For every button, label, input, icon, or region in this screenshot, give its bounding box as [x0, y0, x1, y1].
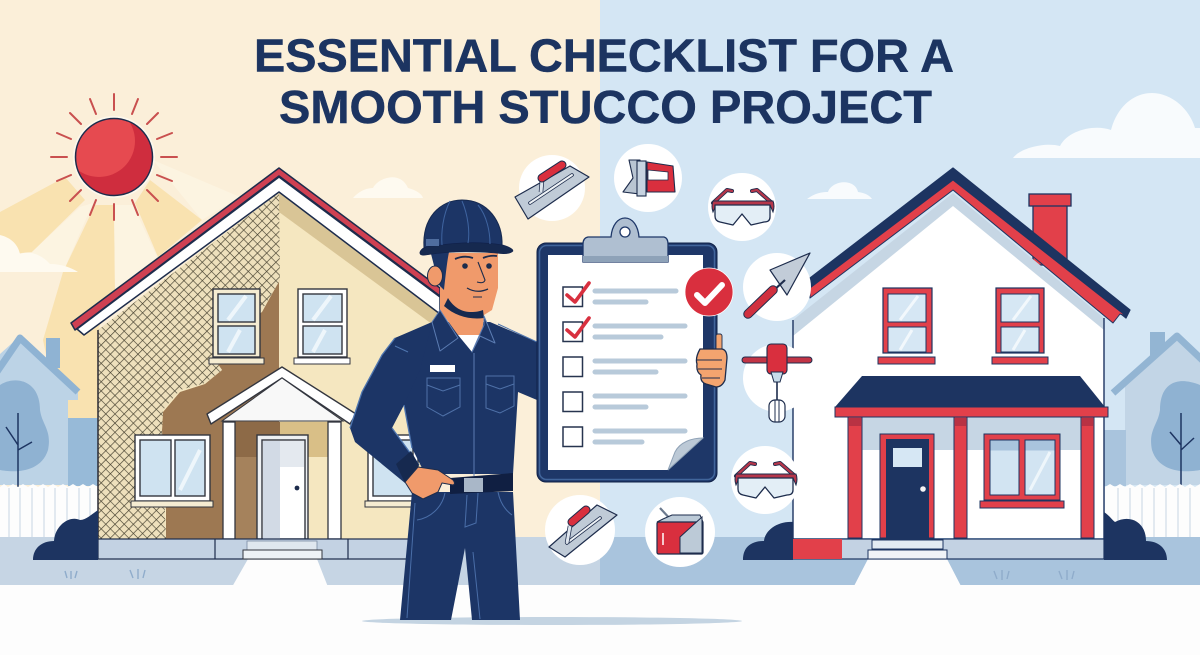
- background: cool sky right: [600, 0, 1200, 540]
- checkboxes: [563, 287, 582, 446]
- right house: upper windows: [878, 288, 1048, 364]
- pockets: [427, 376, 514, 416]
- hand on hip: [405, 467, 454, 499]
- left house: upper windows: [209, 289, 350, 364]
- ear and hair: [427, 250, 449, 290]
- belt: [450, 473, 513, 494]
- right house: door: [880, 434, 934, 538]
- ground bands: [0, 537, 1200, 655]
- worker: [350, 200, 537, 620]
- fence right: [1105, 484, 1200, 537]
- shirt and collar: [458, 335, 481, 352]
- left house: wall: [98, 192, 440, 540]
- icon circle: plastering trowel: [515, 155, 589, 221]
- icon circle: mortar bucket: [645, 497, 715, 567]
- background: warm sky left: [0, 0, 600, 540]
- left house: porch and door: [207, 367, 356, 539]
- bent arm: [350, 323, 432, 483]
- icon circle: margin trowel: [743, 253, 811, 321]
- clip: [583, 218, 668, 262]
- right house: chimney: [1029, 194, 1071, 265]
- bushes right: [743, 512, 1167, 560]
- right house: roof: [810, 168, 1130, 323]
- torso: [395, 322, 537, 474]
- holding hand: [696, 334, 727, 387]
- sun: [51, 94, 177, 220]
- icon circle: safety goggles: [708, 173, 776, 241]
- title: ESSENTIAL CHECKLIST FOR A: [254, 30, 954, 82]
- clouds: [0, 177, 423, 272]
- right house: porch window: [980, 434, 1064, 508]
- icon circle: hawk tool: [614, 144, 682, 212]
- title: [254, 30, 954, 133]
- clouds: right sky: [807, 93, 1200, 199]
- badge: [685, 268, 733, 316]
- icon circle: paddle mixer: [743, 344, 811, 422]
- background house right: [1104, 332, 1200, 487]
- bush left: [33, 510, 98, 560]
- right house: foundation and steps: [793, 539, 1104, 559]
- page curl: [668, 438, 703, 470]
- wire mesh: [98, 193, 280, 539]
- name tag: [430, 365, 455, 372]
- clipboard: [537, 218, 733, 482]
- icon circle: safety goggles 2: [731, 446, 799, 514]
- hard hat: [420, 200, 513, 255]
- checklist lines: [595, 291, 685, 442]
- fence left: [0, 484, 98, 537]
- right house: wall: [793, 193, 1104, 539]
- neck and head: [440, 253, 498, 335]
- paper: [548, 255, 703, 470]
- background house left: [0, 336, 100, 487]
- face details: [455, 256, 497, 297]
- worker shadow: [362, 617, 742, 625]
- right house: porch: [835, 376, 1108, 538]
- icon circle: finishing trowel: [545, 495, 617, 565]
- stucco brown coat: [162, 280, 280, 540]
- red checkmarks: [567, 283, 589, 337]
- left house: lower windows: [131, 435, 420, 507]
- left house: roof: [71, 168, 440, 335]
- legs: [400, 492, 520, 620]
- left house: foundation and steps: [98, 539, 428, 559]
- title: SMOOTH STUCCO PROJECT: [279, 81, 932, 133]
